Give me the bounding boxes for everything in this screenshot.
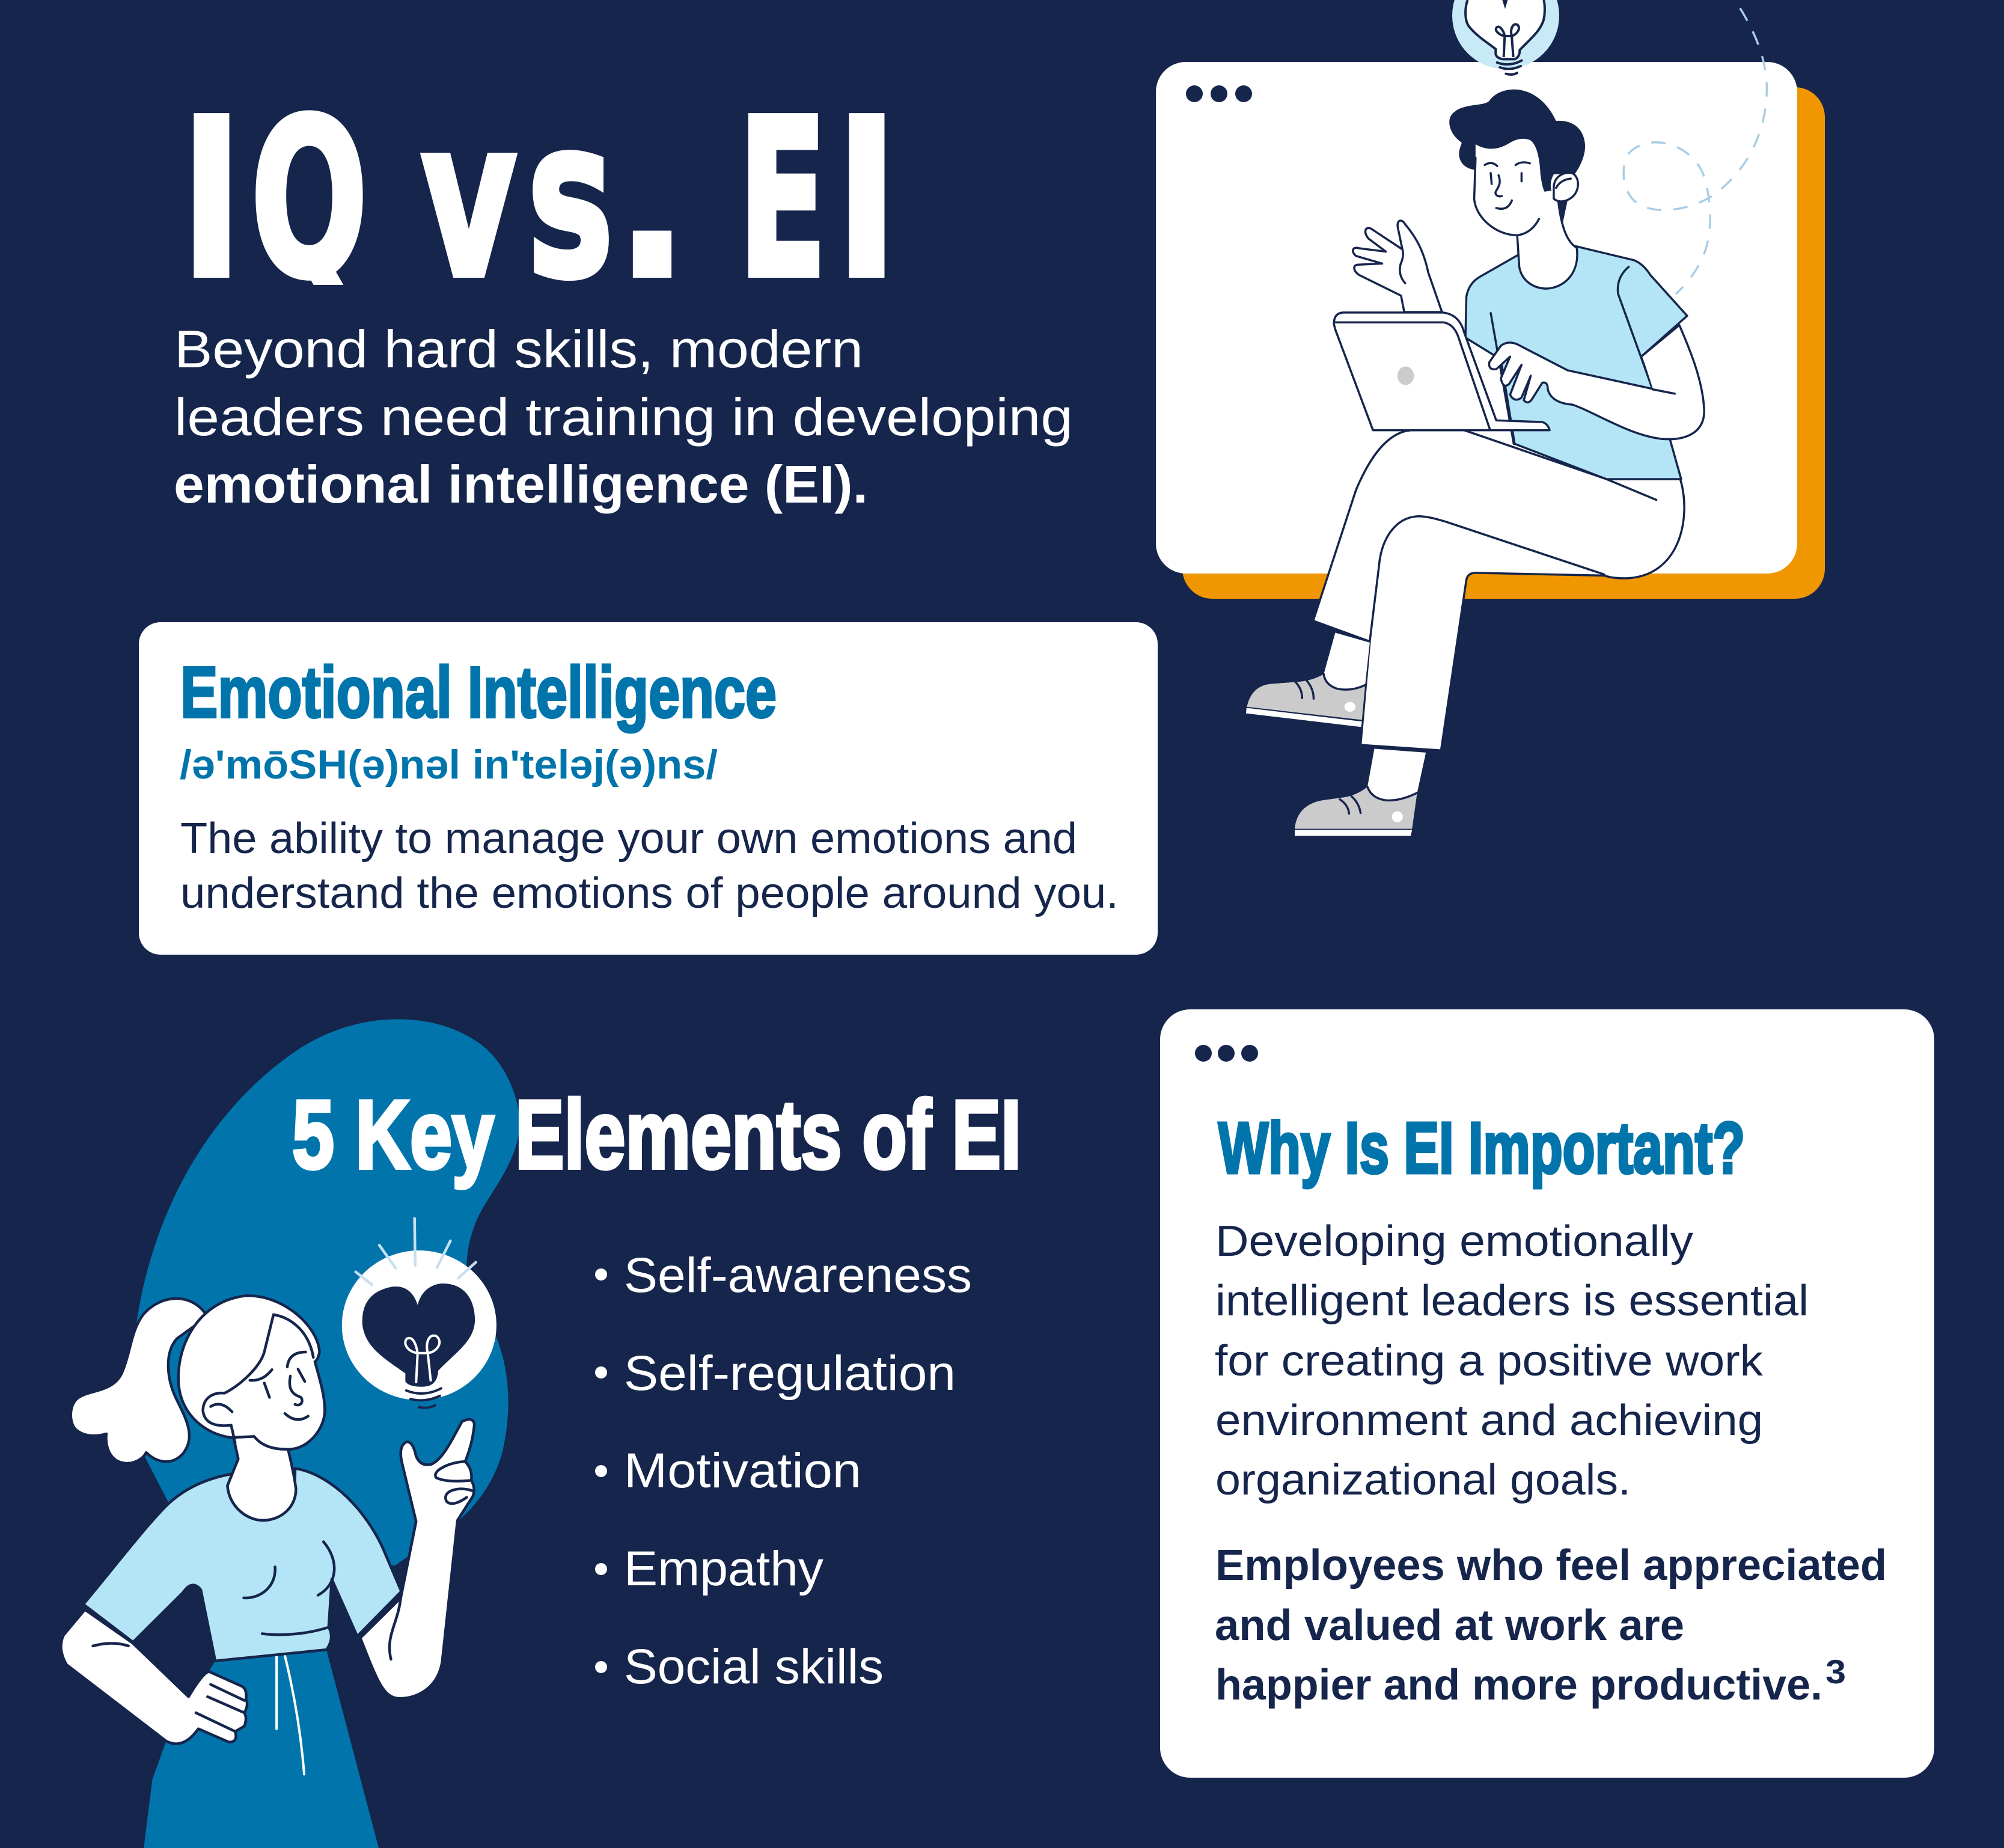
blue blob background: [135, 1019, 521, 1566]
title: v: [421, 73, 517, 326]
left arm on hip: [61, 1609, 247, 1744]
white window card: [1156, 62, 1797, 574]
lower leg and shoe, front: [1367, 748, 1426, 801]
trousers: [1313, 430, 1684, 750]
icon: heart bulb: [342, 1219, 496, 1408]
raised hand: [1353, 221, 1442, 312]
window dots: [1186, 85, 1252, 102]
face: [1474, 136, 1559, 235]
shirt: [84, 1469, 402, 1661]
neck: [1517, 191, 1577, 289]
skirt: [144, 1650, 379, 1848]
window dots: [1195, 1045, 1258, 1062]
heading: Why Is EI Important?: Why Is EI Important?: [1218, 1107, 1745, 1189]
body paragraph: intelligent leaders is essential: [1215, 1277, 1809, 1325]
lower leg and shoe, rear: [1324, 633, 1370, 690]
title: I: [181, 73, 242, 326]
list item: Self-awareness: Self-awareness: [624, 1248, 972, 1303]
shirt: [1465, 246, 1687, 479]
ear: [1554, 173, 1578, 201]
title: s: [527, 73, 614, 326]
body paragraph: for creating a positive work: [1215, 1337, 1764, 1385]
heading: 5 Key Elements of EI: 5 Key: [292, 1080, 494, 1189]
arm and typing hand: [1489, 325, 1704, 439]
panel: why is EI important: [1160, 1009, 1934, 1778]
intro text: leaders need training in developing: [174, 387, 1073, 447]
list item: Self-regulation: Self-regulation: [624, 1346, 956, 1401]
body paragraph: [1215, 1217, 1809, 1504]
head: [179, 1296, 325, 1449]
neck: [227, 1424, 296, 1520]
woman figure: [61, 1296, 474, 1848]
heading: Emotional Intelligence: Emotional Intelligence: [180, 651, 777, 733]
bold statement: and valued at work are: [1215, 1602, 1684, 1650]
list item: Motivation: Motivation: [624, 1443, 861, 1498]
bold statement: 3: [1825, 1653, 1846, 1690]
title: .: [616, 73, 688, 326]
panel: emotional intelligence definition: [139, 622, 1158, 955]
panel: man illustration: [1156, 0, 1825, 836]
body paragraph: Developing emotionally: [1215, 1217, 1693, 1265]
face details: [250, 1352, 308, 1419]
definition text: The ability to manage your own emotions and: [180, 815, 1077, 863]
intro text: Beyond hard skills, modern: [174, 319, 863, 379]
body paragraph: environment and achieving: [1215, 1397, 1763, 1445]
list item: Social skills: Social skills: [624, 1639, 884, 1694]
ear and hairline: [203, 1315, 313, 1443]
man figure: [1246, 90, 1704, 836]
heading: 5 Key Elements of EI: Elements of EI: [515, 1080, 1021, 1189]
intro text: [174, 319, 1073, 514]
phonetic spelling: /ə'mōSH(ə)nəl in'teləj(ə)ns/: [180, 742, 718, 788]
laptop: [1334, 313, 1550, 430]
list: 5 key elements: [595, 1248, 972, 1694]
body paragraph: organizational goals.: [1215, 1456, 1631, 1504]
dashed flight path: [1624, 8, 1767, 294]
title: Q: [251, 73, 368, 326]
bold statement: Employees who feel appreciated: [1215, 1541, 1887, 1589]
bold statement: [1215, 1541, 1887, 1709]
title: E: [738, 73, 827, 326]
bold statement: happier and more productive.: [1215, 1661, 1822, 1709]
ponytail: [71, 1299, 206, 1463]
orange backing card: [1182, 87, 1825, 599]
hair: [1449, 90, 1585, 192]
definition text: understand the emotions of people around you.: [180, 869, 1119, 917]
right arm with raised finger: [360, 1419, 474, 1698]
list item: Empathy: Empathy: [624, 1541, 823, 1596]
definition text: [180, 815, 1119, 917]
intro text: emotional intelligence (EI).: [174, 454, 868, 514]
title: I: [836, 73, 897, 326]
panel: woman illustration: [61, 1019, 521, 1848]
icon: heart light bulb: [1452, 0, 1559, 75]
